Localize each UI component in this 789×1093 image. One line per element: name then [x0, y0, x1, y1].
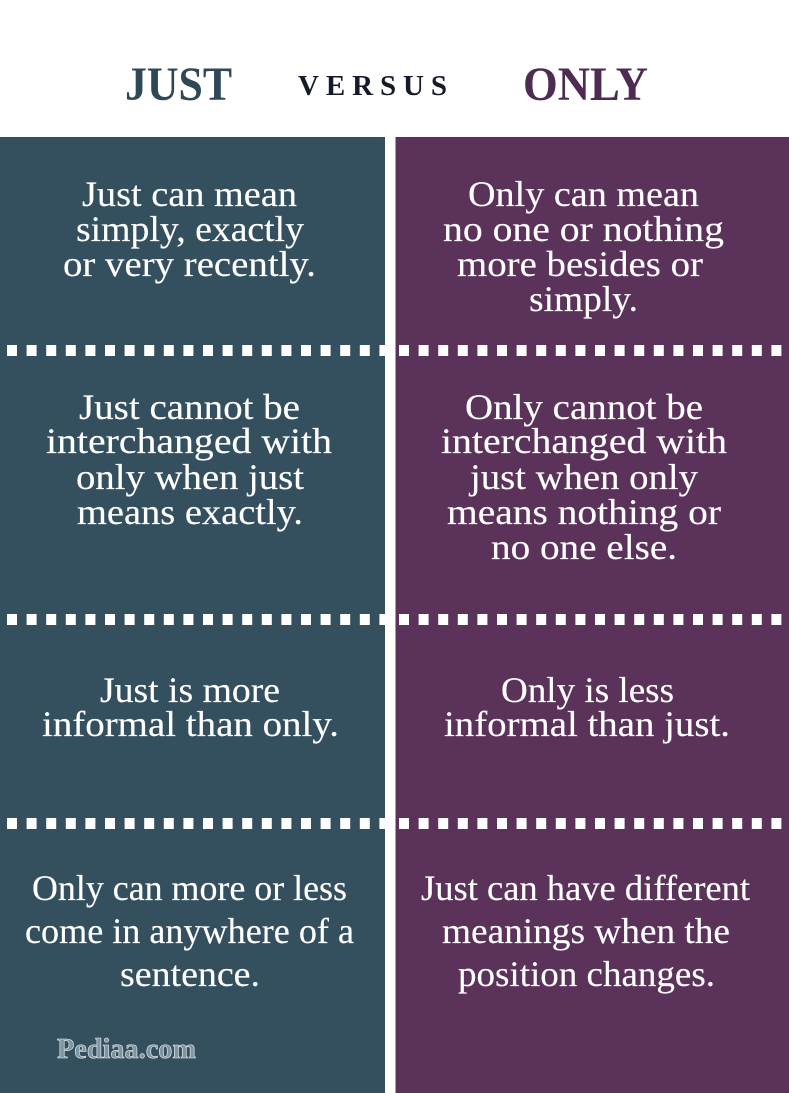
text block: only row 2: no one else.: [491, 527, 677, 567]
panel: only column: [396, 137, 789, 1093]
text block: just row 2: [46, 387, 332, 532]
text block: just row 2: Just cannot be: [79, 387, 300, 427]
title: only: ONLY: [523, 58, 648, 111]
title: just: JUST: [125, 58, 232, 111]
text block: only row 1: no one or nothing: [443, 209, 724, 249]
text block: just row 2: only when just: [76, 457, 304, 497]
header: [125, 58, 648, 111]
text block: only row 4: meanings when the: [442, 911, 730, 951]
text block: just row 1: or very recently.: [63, 244, 316, 284]
text block: just row 1: Just can mean: [82, 174, 297, 214]
text block: just row 2: means exactly.: [77, 492, 303, 532]
text block: only row 2: [441, 387, 727, 567]
text block: only row 2: means nothing or: [447, 492, 721, 532]
text block: only row 2: Only cannot be: [465, 387, 703, 427]
text block: just row 1: simply, exactly: [76, 209, 304, 249]
text block: only row 4: [421, 868, 750, 994]
text block: only row 1: Only can mean: [468, 174, 699, 214]
heading: versus: VERSUS: [298, 70, 447, 102]
text block: only row 1: more besides or: [457, 244, 703, 284]
text block: just row 4: [25, 868, 354, 994]
text block: just row 3: [42, 670, 339, 744]
text block: only row 2: just when only: [468, 457, 698, 497]
text block: just row 3: Just is more: [100, 670, 280, 710]
text block: only row 2: interchanged with: [441, 421, 727, 461]
text block: only row 4: Just can have different: [421, 868, 750, 908]
text block: only row 4: position changes.: [458, 954, 715, 994]
dotted dividers: [7, 350, 782, 824]
text block: only row 3: informal than just.: [444, 704, 730, 744]
text block: only row 1: simply.: [529, 279, 638, 319]
text block: only row 3: [444, 670, 730, 744]
text block: just row 3: informal than only.: [42, 704, 339, 744]
text block: only row 3: Only is less: [501, 670, 674, 710]
text block: just row 4: sentence.: [120, 954, 260, 994]
text block: just row 2: interchanged with: [46, 421, 332, 461]
text block: only row 1: [443, 174, 724, 319]
text block: just row 1: [63, 174, 316, 284]
text block: just row 4: Only can more or less: [32, 868, 347, 908]
panel: just column: [0, 137, 385, 1093]
logo: pediaa.com: Pediaa.com: [57, 1033, 196, 1065]
text block: just row 4: come in anywhere of a: [25, 911, 354, 951]
